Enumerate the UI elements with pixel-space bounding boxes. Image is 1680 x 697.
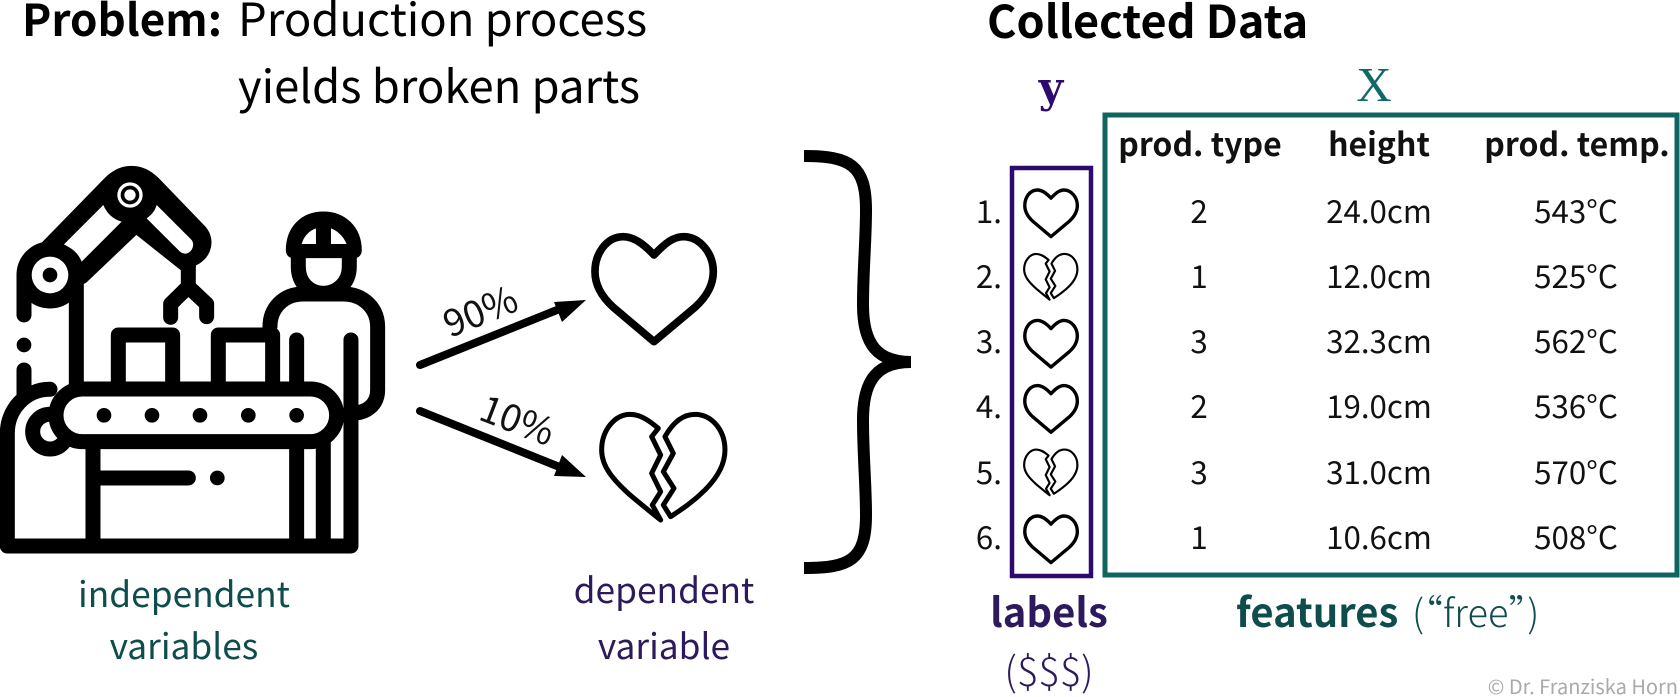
table header: [1118, 120, 1670, 166]
label: independent variables: variables: [110, 619, 258, 670]
arrow: 10 percent: [420, 378, 586, 477]
title: problem: [22, 0, 647, 117]
label: dependent variable: variable: [598, 619, 730, 670]
table rows: 536°C: [1534, 383, 1618, 428]
row numbers: 5.: [976, 449, 1002, 494]
table rows: 508°C: [1534, 514, 1618, 559]
label: independent variables: [78, 567, 290, 670]
table rows: 562°C: [1534, 318, 1618, 363]
table box: features X: [1105, 115, 1677, 575]
table rows: 543°C: [1534, 188, 1618, 233]
row numbers: 6.: [976, 514, 1002, 559]
label: features free: features: [1236, 581, 1398, 639]
row numbers: 3.: [976, 318, 1002, 363]
icon: robot arm, conveyor and worker: [7, 173, 378, 546]
arrow: 10 percent: 10%: [473, 378, 564, 457]
table rows: 570°C: [1534, 449, 1618, 494]
table header: height: [1328, 120, 1430, 166]
label: labels cost: labels: [990, 581, 1108, 639]
table rows: 2: [1190, 188, 1208, 233]
row numbers: [976, 188, 1002, 559]
table header: prod. type: [1118, 120, 1282, 166]
label: dependent variable: dependent: [574, 563, 754, 614]
label: labels cost: ($$$): [1004, 640, 1094, 697]
table rows: 12.0cm: [1326, 253, 1432, 298]
table rows: 3: [1190, 318, 1208, 363]
title: problem: yields broken parts: [238, 51, 640, 117]
table rows: 31.0cm: [1326, 449, 1432, 494]
row numbers: 2.: [976, 253, 1002, 298]
arrow: 90 percent: [420, 269, 586, 365]
table rows: 1: [1190, 253, 1208, 298]
row numbers: 4.: [976, 383, 1002, 428]
table rows: 3: [1190, 449, 1208, 494]
arrow: 90 percent: 90%: [434, 269, 525, 348]
symbol: X: X: [1356, 57, 1392, 112]
table rows: 1: [1190, 514, 1208, 559]
label column y: [1012, 168, 1091, 576]
table header: prod. temp.: [1484, 120, 1670, 166]
table rows: 24.0cm: [1326, 188, 1432, 233]
symbol: y: y: [1038, 63, 1065, 112]
label: features free: [1236, 581, 1539, 639]
label: labels cost: [990, 581, 1108, 697]
label: independent variables: independent: [78, 567, 290, 618]
table rows: [1190, 188, 1618, 559]
brace: [804, 156, 911, 568]
table rows: 19.0cm: [1326, 383, 1432, 428]
icon: intact heart: [595, 237, 713, 342]
table rows: 10.6cm: [1326, 514, 1432, 559]
table rows: 525°C: [1534, 253, 1618, 298]
icon: broken heart: [602, 414, 725, 520]
table rows: 32.3cm: [1326, 318, 1432, 363]
label: dependent variable: [574, 563, 754, 670]
table rows: 2: [1190, 383, 1208, 428]
row numbers: 1.: [976, 188, 1002, 233]
label: features free: (“free”): [1412, 583, 1539, 638]
